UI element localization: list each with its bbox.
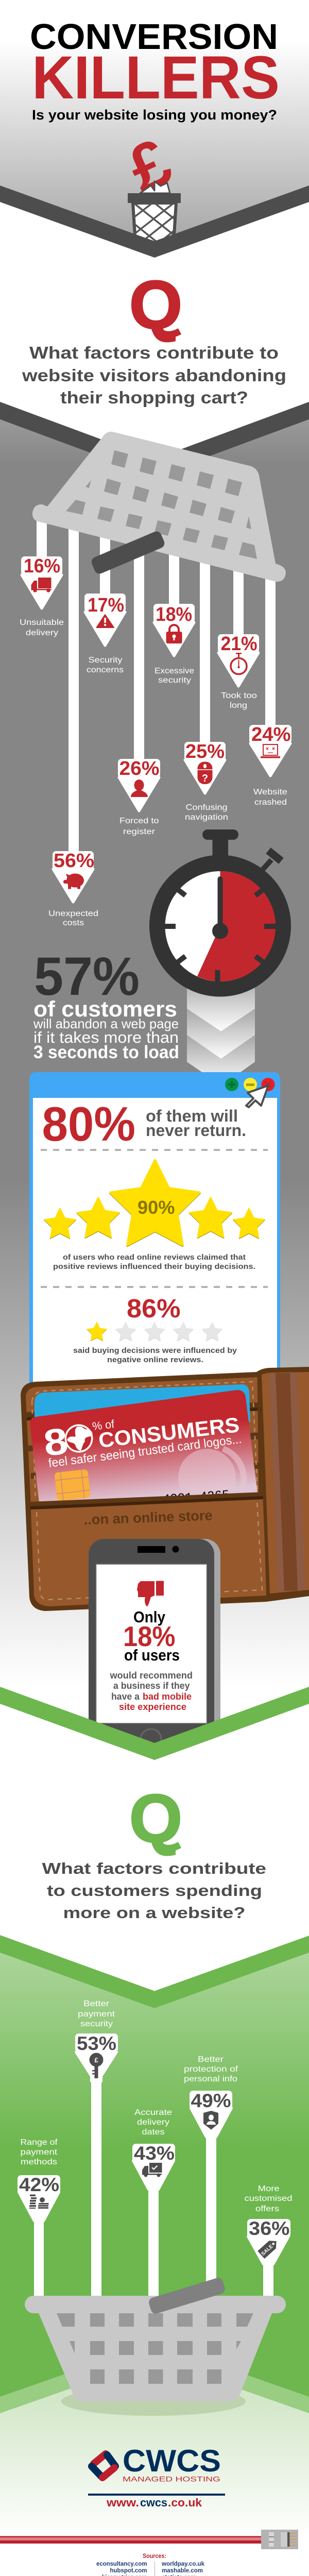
label: more customised offers	[244, 2184, 293, 2213]
panel: second question	[42, 1781, 266, 1922]
arrow: 21% took too long	[218, 564, 259, 686]
arrow: 16% unsuitable delivery	[21, 515, 62, 608]
arrow: 42% payment methods: 42%	[19, 2174, 59, 2195]
icon: globe	[65, 1424, 93, 1453]
arrow: 53% payment security: 53%	[77, 2033, 116, 2054]
red card: 80% of consumers: 80	[42, 1418, 94, 1464]
icon: cursor arrow	[246, 1086, 268, 1107]
question heading	[22, 343, 286, 407]
icon: tipped shopping basket	[32, 432, 286, 582]
icon: thumbs down	[137, 1581, 164, 1606]
floor and footer background	[0, 2359, 309, 2537]
label: better payment security: security	[80, 2020, 113, 2028]
title: conversion killers: CONVERSION	[30, 16, 278, 57]
text labels: abandonment reasons: Website	[253, 788, 287, 796]
stat: 80% never return: never return.	[146, 1121, 246, 1140]
red card: 80% of consumers: 4321 4265	[162, 1488, 230, 1507]
label: range of payment methods: Range of	[21, 2138, 58, 2147]
label: more customised offers: offers	[255, 2205, 279, 2213]
label: accurate delivery dates: dates	[142, 2128, 165, 2137]
arrow: 24% website crashed	[249, 572, 291, 776]
icon: green Q: Q	[129, 1781, 182, 1856]
text: positive reviews	[53, 1253, 255, 1271]
text: only 18% of users: of users	[124, 1646, 180, 1664]
icon: crashed laptop	[261, 744, 280, 758]
icon: coins and notes	[29, 2195, 48, 2209]
icon: wallet with cards	[21, 1367, 309, 1611]
arrow: 49% protection of personal info: 49%	[191, 2090, 231, 2111]
text labels: abandonment reasons: security	[158, 676, 191, 685]
text labels: abandonment reasons	[20, 618, 287, 927]
logo: CWCS managed hosting: CWCS	[123, 2444, 221, 2478]
icon: network cable	[0, 2530, 298, 2549]
icon: mouse with question mark	[198, 761, 212, 784]
text labels: abandonment reasons: register	[123, 827, 155, 836]
basket shadow	[61, 2387, 246, 2416]
sources: Sources:	[143, 2552, 166, 2560]
stat: 57% of customers	[33, 946, 179, 1062]
stat: 57% of customers: 3 seconds to load	[33, 1042, 179, 1062]
arrow: 53% payment security	[75, 2033, 118, 2300]
text labels: abandonment reasons: delivery	[26, 629, 58, 637]
red card: 80% of consumers: feel safer seeing trusted card logos...	[47, 1432, 243, 1470]
label: range of payment methods: methods	[21, 2158, 57, 2166]
label: better protection of personal info	[184, 2055, 238, 2083]
text: only 18% of users: 18%	[123, 1620, 175, 1652]
text: only 18% of users: would recommend	[110, 1670, 193, 1681]
icon: truck with tick	[142, 2163, 162, 2177]
stat: 57% of customers: 57%	[34, 946, 140, 1007]
question heading	[42, 1859, 266, 1922]
arrow: 17% security concerns: 17%	[88, 595, 124, 616]
label: more customised offers: More	[258, 2184, 280, 2193]
label: better protection of personal info: personal info	[184, 2075, 237, 2083]
text labels: abandonment reasons: costs	[63, 919, 84, 927]
website url: www.	[106, 2496, 139, 2509]
icon: sale tag	[258, 2238, 280, 2259]
sources: hubspot.com	[110, 2567, 147, 2574]
website url: .co.uk	[168, 2496, 202, 2509]
icon: key: £	[94, 2056, 98, 2064]
arrow: 56% unexpected costs	[53, 526, 94, 902]
icon: piggy bank	[63, 874, 84, 889]
title: conversion killers: KILLERS	[32, 44, 280, 112]
icon: person	[131, 779, 148, 797]
arrow: 36% customised offers	[247, 2218, 290, 2300]
red card: 80% of consumers: CONSUMERS	[97, 1413, 241, 1452]
text: only 18% of users: a business if they	[113, 1680, 190, 1691]
arrow: 16% unsuitable delivery: 16%	[24, 555, 60, 577]
icon: warning triangle	[97, 615, 114, 628]
stat: 80% never return: of them will	[146, 1107, 238, 1125]
icon: pound sign in waste bin	[128, 141, 181, 241]
text labels: abandonment reasons: crashed	[254, 798, 287, 807]
text: only 18% of users: site experience	[119, 1701, 186, 1712]
icon: truck	[31, 578, 52, 592]
icon: shield with person	[203, 2111, 218, 2130]
chevron band: header	[0, 185, 309, 258]
label: range of payment methods: payment	[21, 2148, 58, 2157]
label: accurate delivery dates: Accurate	[134, 2108, 172, 2117]
text: only 18% of users	[110, 1608, 193, 1712]
chevron band: green second	[0, 1935, 309, 2008]
label: more customised offers: customised	[244, 2194, 293, 2203]
title: conversion killers	[30, 16, 280, 112]
website url: cwcs	[140, 2496, 167, 2509]
question heading: website visitors abandoning	[22, 366, 286, 385]
logo: CWCS managed hosting	[88, 2444, 225, 2509]
label: range of payment methods	[21, 2138, 58, 2166]
icon: pound sign in waste bin: £	[117, 124, 182, 208]
text labels: abandonment reasons: Unexpected	[48, 909, 98, 918]
label: better payment security	[78, 1999, 115, 2028]
stat: 80% never return: 80%	[42, 1097, 135, 1151]
text labels: abandonment reasons: Excessive	[154, 667, 194, 675]
chevron band: grey section	[0, 402, 309, 477]
panel: grey body background	[0, 419, 309, 1743]
sources: mashable.com	[162, 2567, 203, 2574]
question heading: more on a website?	[63, 1904, 245, 1922]
arrow: 36% customised offers: 36%	[249, 2218, 289, 2239]
stat: 57% of customers: of customers	[33, 997, 177, 1022]
label: accurate delivery dates	[134, 2108, 172, 2137]
arrow: 26% forced to register	[118, 541, 160, 811]
text: positive reviews: positive reviews influenced their buying decisions.	[53, 1262, 255, 1271]
icon: stopwatch	[149, 829, 291, 996]
text: only 18% of users: bad mobile	[143, 1691, 192, 1702]
icon: smartphone	[89, 1539, 220, 1776]
arrow: 56% unexpected costs: 56%	[54, 850, 94, 872]
text: on an online store: ..on an online store	[83, 1507, 213, 1528]
arrow: 25% confusing navigation	[184, 556, 226, 793]
icon: mouse with question mark: ?	[202, 773, 208, 784]
icon: padlock	[166, 625, 182, 643]
text: positive reviews: of users who read online reviews claimed that	[63, 1253, 246, 1262]
text labels: abandonment reasons: Security	[89, 656, 123, 665]
icon: full shopping basket	[25, 2277, 286, 2401]
text labels: abandonment reasons: long	[230, 701, 247, 710]
arrow: 43% delivery dates	[132, 2143, 175, 2300]
blue card	[35, 1384, 250, 1422]
text: negative reviews: said buying decisions were influenced by	[73, 1346, 237, 1355]
arrow: 25% confusing navigation: 25%	[185, 741, 225, 762]
logo mark	[92, 2454, 115, 2478]
text: only 18% of users: have a	[111, 1691, 140, 1702]
stat: 57% of customers: if it takes more than	[33, 1028, 179, 1046]
logo: CWCS managed hosting: MANAGED HOSTING	[123, 2475, 220, 2483]
icon: sale tag: SALE	[260, 2244, 274, 2257]
website url	[106, 2496, 202, 2509]
stars: 90% rating: 90%	[138, 1197, 175, 1218]
red card: 80% of consumers	[30, 1390, 258, 1507]
question heading: What factors contribute to	[29, 343, 279, 362]
question heading: to customers spending	[47, 1882, 262, 1900]
icon: red Q: Q	[129, 267, 182, 343]
chevrons below stopwatch	[187, 988, 255, 1072]
text labels: abandonment reasons: Took too	[221, 691, 257, 700]
sources: worldpay.co.uk	[161, 2560, 204, 2567]
stars: one star rating	[87, 1322, 222, 1341]
white area below grey section	[0, 1704, 309, 1937]
label: better protection of personal info: protection of	[184, 2065, 238, 2074]
stat: 57% of customers: will abandon a web page	[33, 1016, 179, 1031]
label: better protection of personal info: Better	[198, 2055, 224, 2064]
floor band	[0, 2343, 309, 2421]
icon: key	[90, 2053, 103, 2078]
text labels: abandonment reasons: concerns	[87, 666, 124, 674]
arrow: 43% delivery dates: 43%	[134, 2143, 175, 2164]
chevron band: green	[0, 1687, 309, 1760]
sources	[96, 2552, 214, 2576]
sources: econsultancy.com	[96, 2560, 147, 2567]
red card: 80% of consumers: % of	[92, 1417, 115, 1433]
text: only 18% of users: Only	[133, 1608, 166, 1626]
question heading: their shopping cart?	[60, 388, 248, 407]
arrow: 18% excessive security	[153, 546, 195, 656]
stat: 86%: 86%	[127, 1294, 180, 1323]
label: better payment security: payment	[78, 2010, 115, 2019]
arrow: 17% security concerns	[84, 531, 126, 646]
arrow: 18% excessive security: 18%	[156, 604, 192, 625]
stars: 90% rating	[44, 1160, 265, 1246]
panel: green background	[0, 1953, 309, 2421]
window buttons	[225, 1078, 275, 1091]
icon: stopwatch	[231, 653, 247, 674]
card chip	[54, 1469, 91, 1501]
text labels: abandonment reasons: Forced to	[119, 817, 159, 825]
label: accurate delivery dates: delivery	[137, 2118, 169, 2127]
label: better payment security: Better	[83, 1999, 109, 2008]
arrow: 42% payment methods	[18, 2174, 60, 2300]
panel: first question	[22, 267, 286, 407]
text labels: abandonment reasons: Confusing	[185, 803, 228, 812]
panel: header	[0, 24, 309, 241]
stat: 80% never return	[42, 1097, 246, 1151]
panel: browser window	[29, 1072, 280, 1392]
text: negative reviews: negative online reviews.	[107, 1355, 203, 1364]
text labels: abandonment reasons: navigation	[185, 813, 228, 822]
text: negative reviews	[73, 1346, 237, 1364]
text labels: abandonment reasons: Unsuitable	[20, 618, 64, 627]
wallet front pocket	[30, 1375, 270, 1606]
subtitle: Is your website losing you money?	[32, 107, 277, 123]
arrow: 26% forced to register: 26%	[119, 758, 160, 779]
arrow: 49% protection of personal info	[190, 2090, 232, 2282]
arrow: 21% took too long: 21%	[221, 633, 258, 655]
question heading: What factors contribute	[42, 1859, 266, 1877]
arrow: 24% website crashed: 24%	[251, 724, 290, 745]
